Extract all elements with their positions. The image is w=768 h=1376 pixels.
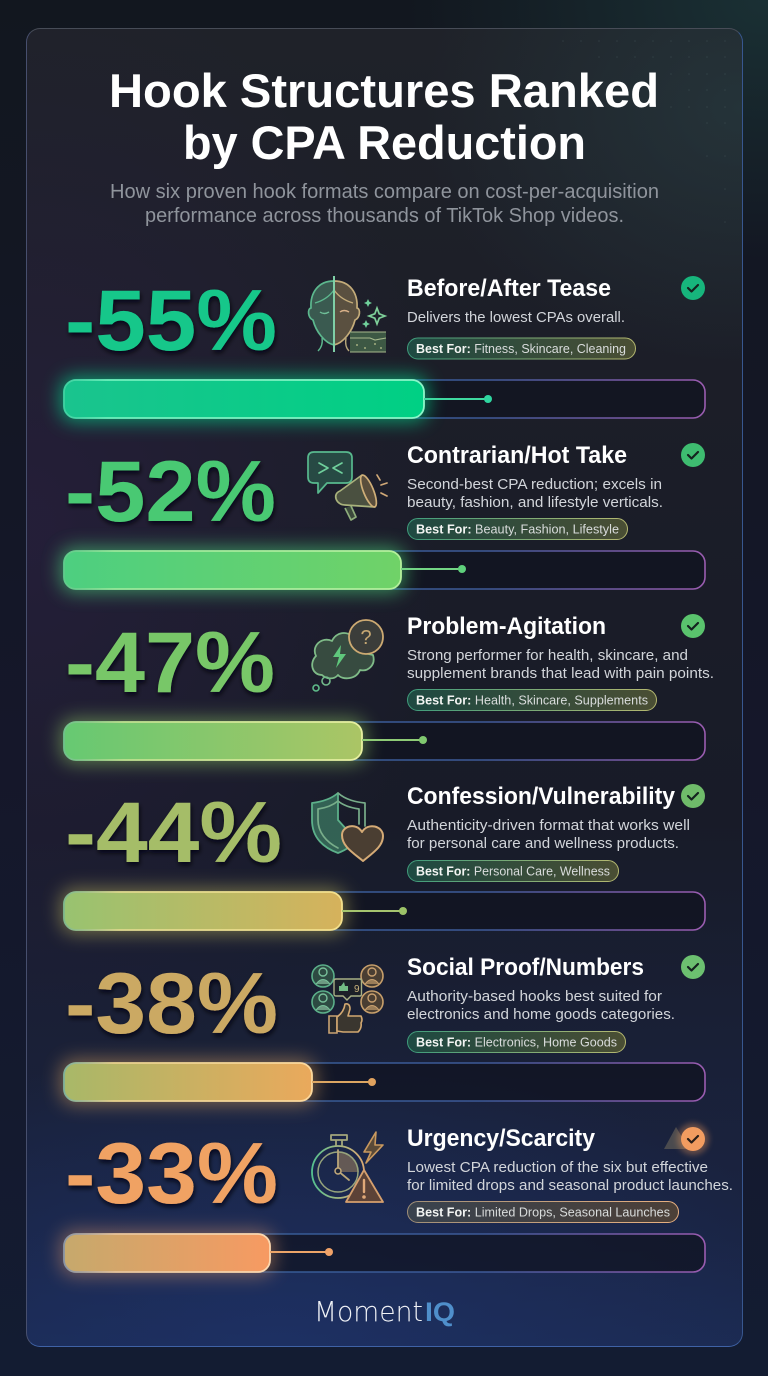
best for pill [408, 518, 628, 540]
progress bar [60, 1230, 705, 1276]
icon: social proof people and thumbs up [312, 965, 383, 1033]
heading: Confession/Vulnerability [407, 783, 676, 810]
best for pill: Best For: Fitness, Skincare, Cleaning [416, 342, 626, 356]
best for pill [408, 690, 656, 710]
subtitle: performance across thousands of TikTok Shop videos. [145, 205, 624, 227]
panel: Urgency/Scarcity [60, 1123, 733, 1276]
best for pill [408, 1032, 626, 1052]
description: for personal care and wellness products. [407, 836, 679, 852]
percentage: -52%: -52% [65, 444, 276, 540]
panel: Contrarian/Hot Take [60, 442, 705, 593]
icon: thought cloud with question [312, 620, 383, 691]
description: Authenticity-driven format that works well [407, 818, 690, 834]
icon: speech bubble and megaphone [308, 452, 387, 520]
footer logo: MomentIQ: IQ [425, 1297, 455, 1327]
title [109, 64, 659, 169]
progress bar [60, 1059, 705, 1105]
best for pill [408, 338, 636, 359]
icon: before after face [309, 276, 386, 352]
icon: social proof people and thumbs up: 9 [354, 984, 360, 995]
description [407, 648, 714, 682]
check badge [681, 955, 705, 979]
description: Delivers the lowest CPAs overall. [407, 310, 625, 326]
check badge [681, 784, 705, 808]
description: Strong performer for health, skincare, and [407, 648, 688, 664]
description: electronics and home goods categories. [407, 1007, 675, 1023]
description: Lowest CPA reduction of the six but effective [407, 1160, 708, 1176]
percentage: -47%: -47% [65, 615, 275, 711]
best for pill [408, 860, 618, 882]
description: beauty, fashion, and lifestyle verticals. [407, 495, 663, 511]
heading: Social Proof/Numbers [407, 954, 644, 981]
panel: Confession/Vulnerability [60, 783, 705, 934]
dot grid decoration [562, 40, 726, 223]
heading: Contrarian/Hot Take [407, 442, 627, 469]
icon: thought cloud with question: ? [360, 627, 372, 649]
percentage: -55%: -55% [65, 273, 277, 369]
panel: Before/After Tease [60, 273, 705, 422]
icon: stopwatch bolt and warning [312, 1132, 383, 1202]
panel: Social Proof/Numbers [60, 954, 705, 1105]
best for pill: Best For: Personal Care, Wellness [416, 864, 610, 878]
subtitle [110, 181, 659, 227]
percentage: -38%: -38% [65, 956, 278, 1052]
description: supplement brands that lead with pain points. [407, 666, 714, 682]
best for pill: Best For: Electronics, Home Goods [416, 1036, 617, 1050]
description [407, 989, 675, 1023]
check badge [681, 276, 705, 300]
progress bar [60, 547, 705, 593]
heading: Problem-Agitation [407, 613, 606, 640]
percentage: -44%: -44% [65, 785, 282, 881]
heading: Before/After Tease [407, 275, 611, 302]
subtitle: How six proven hook formats compare on cost-per-acquisition [110, 181, 659, 203]
check badge [681, 443, 705, 467]
description: for limited drops and seasonal product launches. [407, 1178, 733, 1194]
panel: Problem-Agitation [60, 613, 714, 764]
description [407, 818, 690, 852]
best for pill: Best For: Beauty, Fashion, Lifestyle [416, 522, 619, 536]
heading: Urgency/Scarcity [407, 1125, 596, 1152]
best for pill: Best For: Health, Skincare, Supplements [416, 694, 648, 708]
description: Authority-based hooks best suited for [407, 989, 662, 1005]
title: by CPA Reduction [183, 116, 586, 169]
footer logo: MomentIQ: Moment [314, 1295, 423, 1328]
progress bar [60, 718, 705, 764]
description: Second-best CPA reduction; excels in [407, 477, 662, 493]
description [407, 1160, 733, 1194]
best for pill [408, 1202, 678, 1222]
check badge [681, 614, 705, 638]
icon: shield and heart [312, 793, 383, 861]
warning and check badge [664, 1123, 709, 1155]
title: Hook Structures Ranked [109, 64, 659, 117]
description [407, 477, 663, 511]
percentage: -33%: -33% [65, 1126, 278, 1222]
progress bar [60, 888, 705, 934]
best for pill: Best For: Limited Drops, Seasonal Launches [416, 1206, 670, 1220]
progress bar [60, 376, 705, 422]
